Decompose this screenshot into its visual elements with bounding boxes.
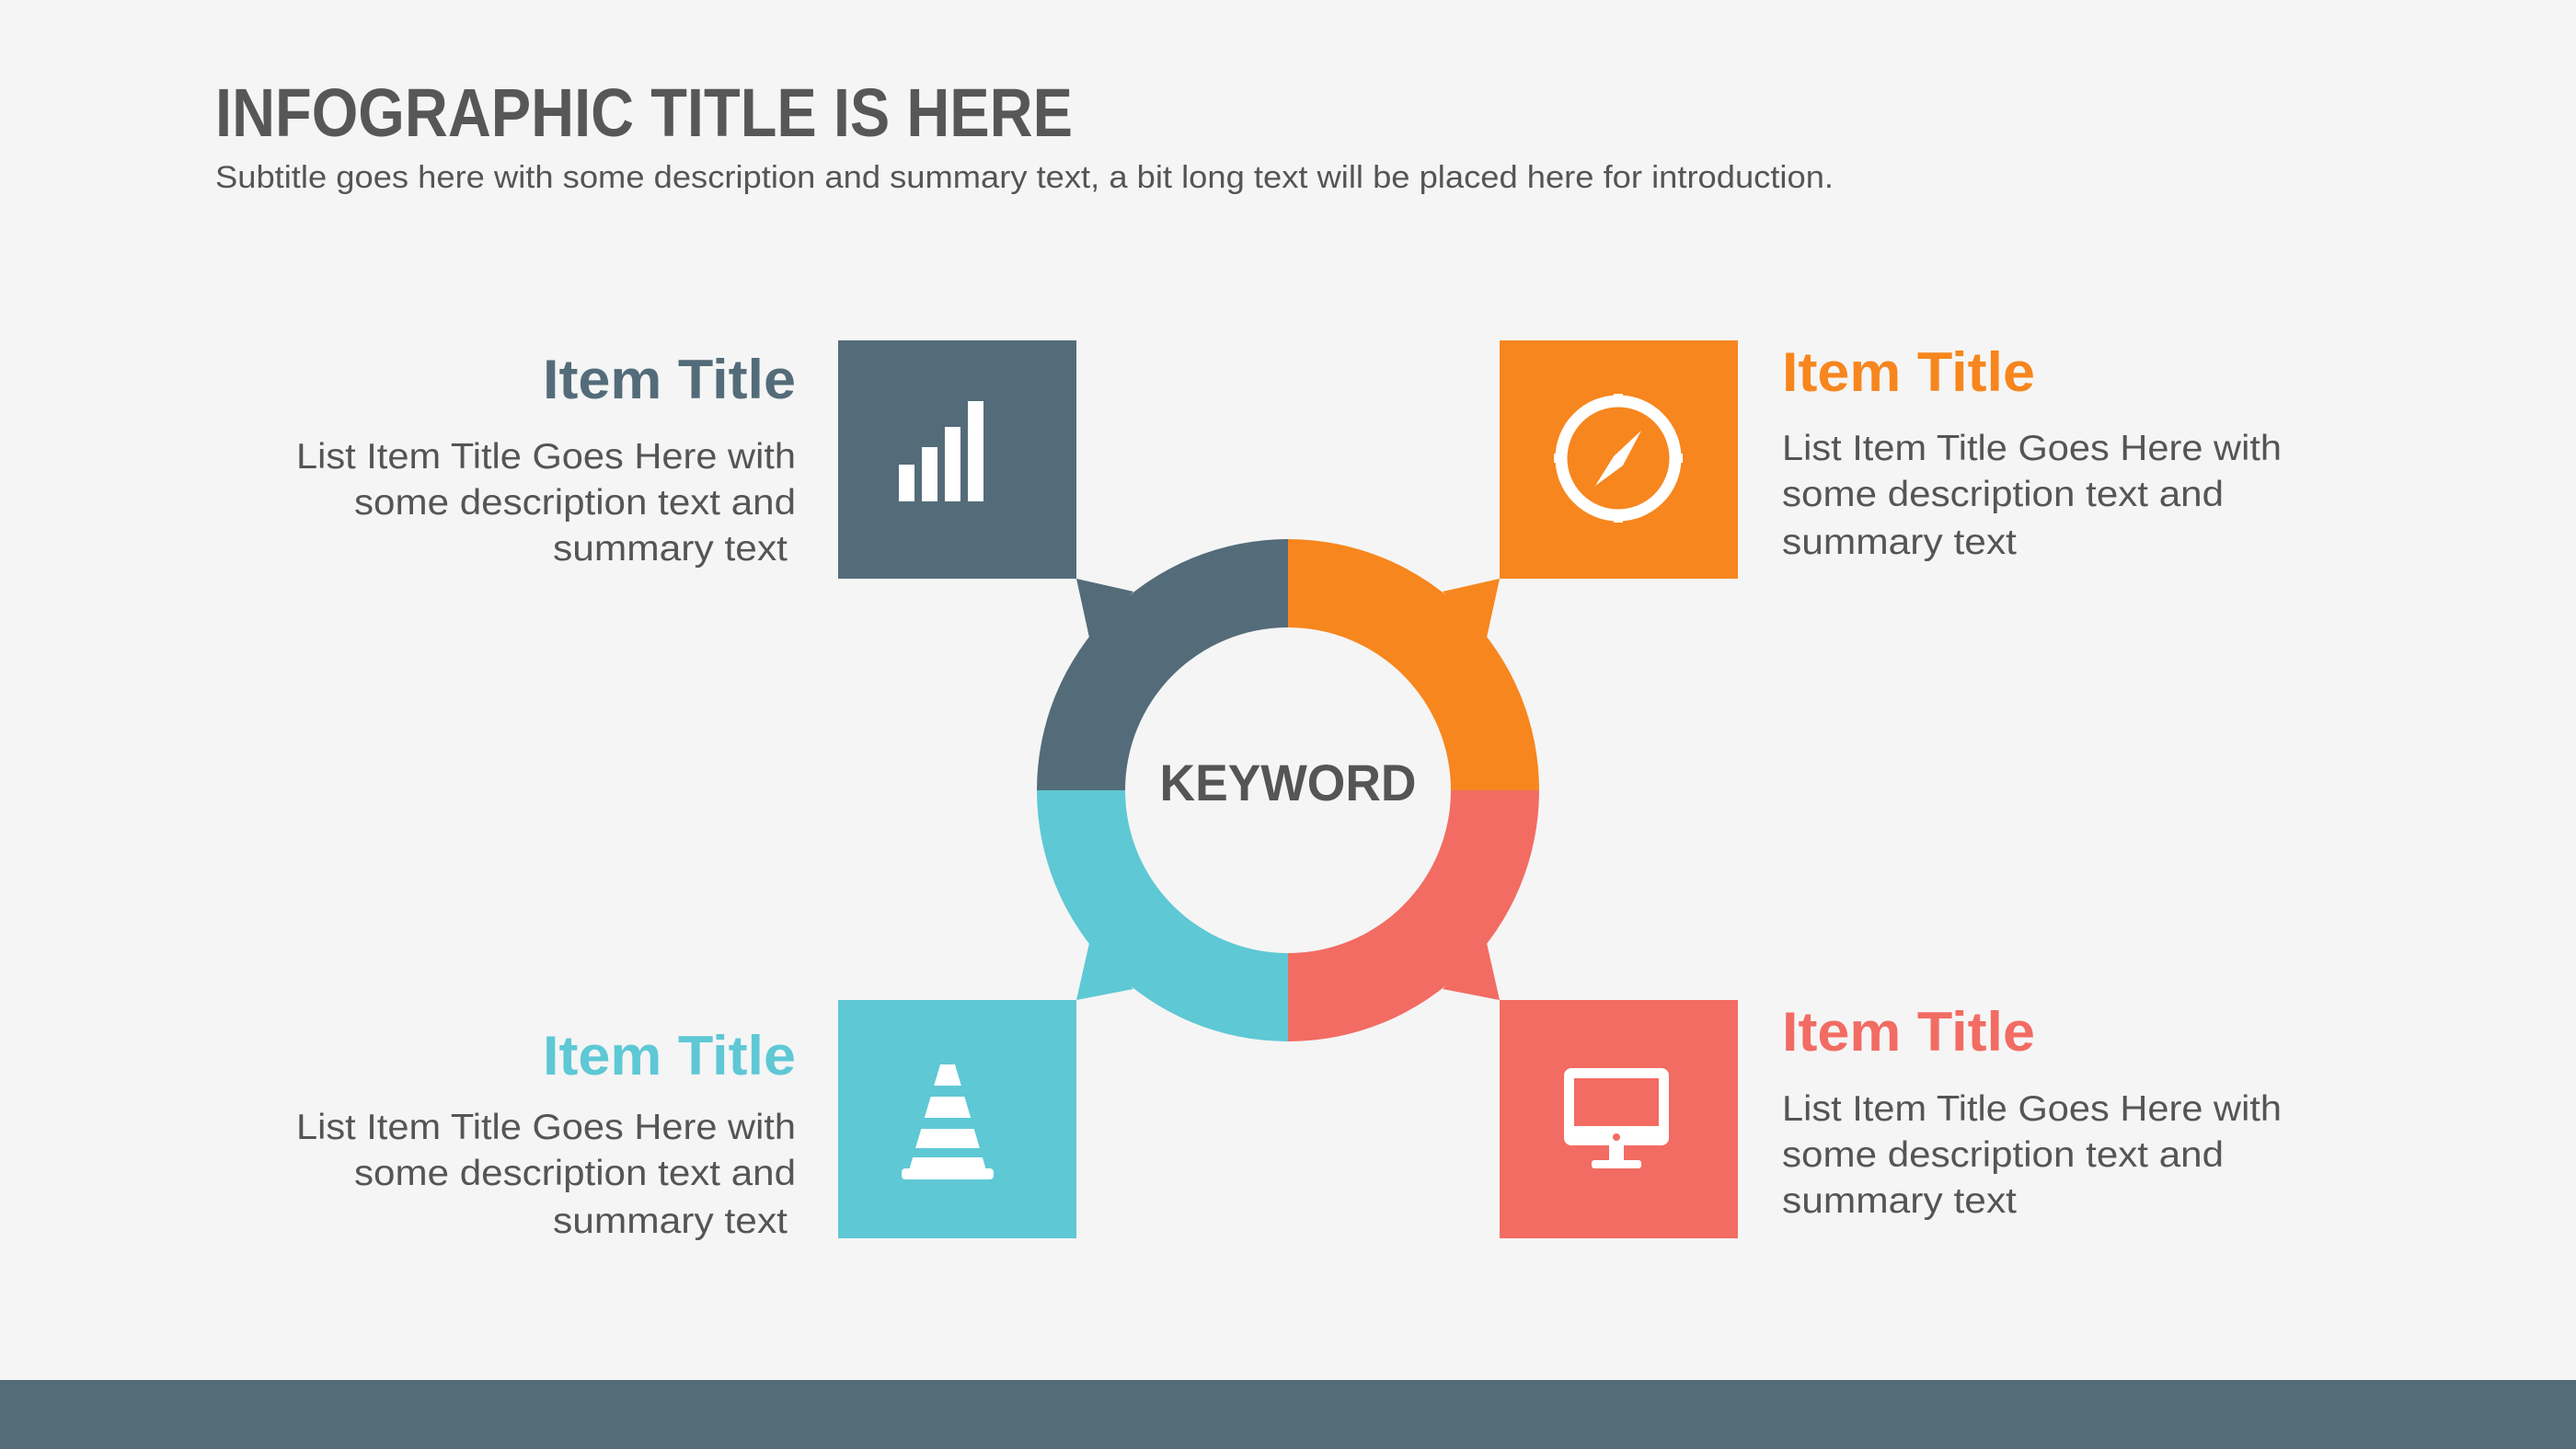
- text block: bottom-left: [296, 1025, 796, 1241]
- ring diagram: [1037, 539, 1539, 1041]
- ring segment: top-right: [1288, 539, 1539, 790]
- box: top-right with compass icon: [1500, 340, 1738, 579]
- text block: bottom-right: some description text and: [1782, 1135, 2224, 1175]
- text block: bottom-left: some description text and: [354, 1154, 796, 1193]
- text block: top-right: summary text: [1782, 523, 2017, 562]
- title: INFOGRAPHIC TITLE IS HERE: [215, 75, 1073, 151]
- text block: bottom-right: [1782, 1001, 2282, 1221]
- text block: bottom-right: List Item Title Goes Here with: [1782, 1089, 2282, 1129]
- text block: bottom-left: summary text: [553, 1202, 788, 1241]
- ring segment: bottom-right: [1288, 790, 1539, 1041]
- text block: bottom-right: Item Title: [1782, 1001, 2035, 1063]
- text block: top-right: some description text and: [1782, 475, 2224, 514]
- text block: top-right: Item Title: [1782, 341, 2035, 403]
- box: bottom-left with cone icon: [838, 1000, 1076, 1238]
- icon: traffic cone: [902, 1064, 994, 1179]
- text block: top-left: Item Title: [543, 349, 796, 410]
- subtitle: Subtitle goes here with some description and summary text, a bit long text will be placed here for introduction.: [215, 160, 1834, 195]
- ring segment: top-left: [1037, 539, 1288, 790]
- ring segment: bottom-left: [1037, 790, 1288, 1041]
- text block: top-left: List Item Title Goes Here with: [296, 437, 796, 477]
- text block: top-left: summary text: [553, 529, 788, 569]
- icon: bar chart: [899, 401, 983, 501]
- text block: bottom-left: List Item Title Goes Here with: [296, 1108, 796, 1147]
- text block: bottom-left: Item Title: [543, 1025, 796, 1087]
- footer bar: [0, 1380, 2576, 1449]
- text block: top-left: some description text and: [354, 483, 796, 523]
- text block: top-right: List Item Title Goes Here with: [1782, 429, 2282, 468]
- box: top-left with bar chart icon: [838, 340, 1076, 579]
- text block: bottom-right: summary text: [1782, 1181, 2017, 1221]
- keyword: KEYWORD: [1159, 753, 1417, 811]
- icon: monitor: [1564, 1068, 1669, 1168]
- icon: compass: [1554, 394, 1683, 523]
- text block: top-right: [1782, 341, 2282, 562]
- text block: top-left: [296, 349, 796, 569]
- box: bottom-right with monitor icon: [1500, 1000, 1738, 1238]
